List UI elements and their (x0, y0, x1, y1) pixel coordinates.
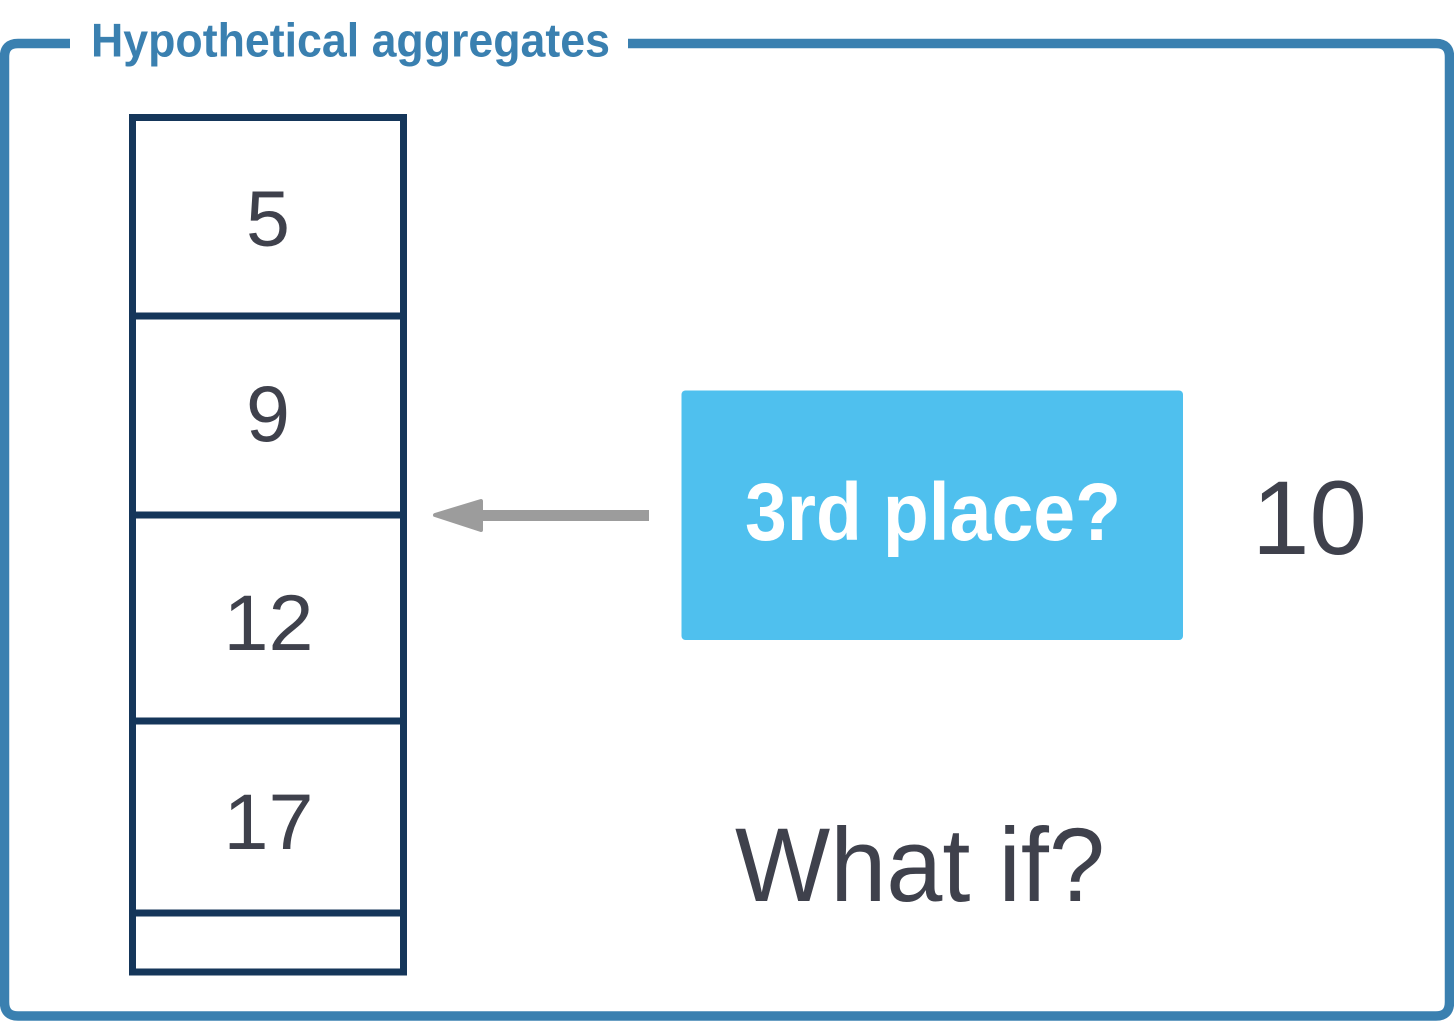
text: what if: What if? (735, 807, 1105, 924)
sorted aggregates stack (132, 118, 407, 976)
value: 12: 12 (224, 578, 314, 667)
callout: 3rd place question (682, 390, 1183, 640)
callout: 3rd place question: 3rd place? (745, 467, 1121, 558)
stack outline and dividers (132, 118, 404, 972)
value: 9: 9 (246, 369, 290, 458)
value: 17: 17 (224, 777, 314, 866)
value: 5: 5 (246, 174, 290, 262)
arrow pointing to the stack (435, 501, 649, 530)
value: 10: 10 (1252, 460, 1367, 577)
stack lower-right offset edge (403, 913, 407, 976)
heading: panel title: Hypothetical aggregates (91, 14, 610, 66)
